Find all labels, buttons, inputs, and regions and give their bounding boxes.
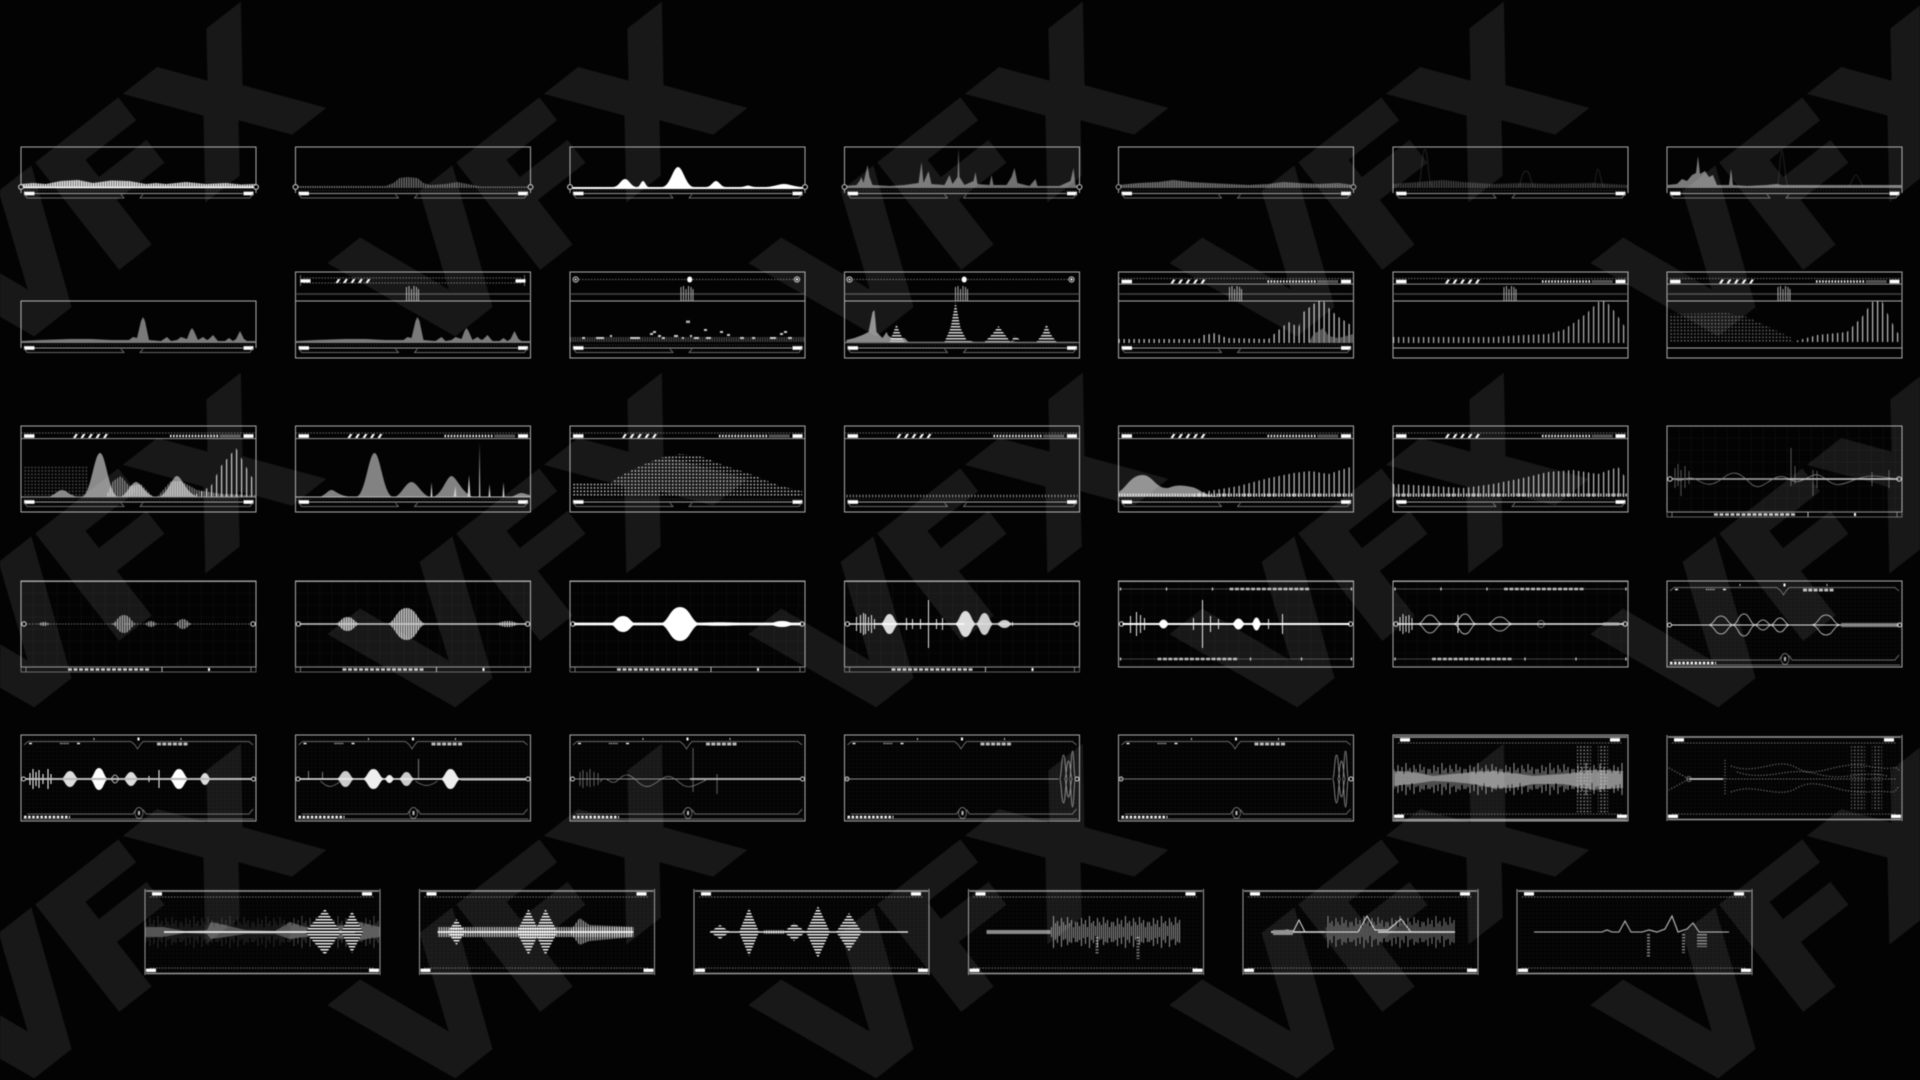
panel: row 1 column 2 waveform — [293, 147, 533, 198]
frame — [1517, 889, 1752, 975]
bottom bracket — [1396, 499, 1626, 506]
bottom bar — [1667, 512, 1902, 517]
frame — [570, 735, 805, 821]
panel: row 4 column 6 waveform — [1393, 581, 1628, 667]
panel: row 1 column 5 waveform — [1116, 147, 1356, 198]
panel: row 6 column 3 waveform — [694, 889, 929, 975]
frame — [1393, 581, 1628, 667]
top status strip — [570, 433, 805, 439]
waveform — [1118, 751, 1348, 807]
waveform — [1122, 600, 1350, 648]
panel: row 4 column 5 waveform — [1118, 581, 1354, 667]
frame — [21, 581, 256, 667]
panel: row 3 column 5 waveform — [1118, 426, 1354, 512]
top status strip — [1118, 278, 1354, 301]
waveform — [1393, 301, 1628, 343]
end markers and bottom bracket — [293, 185, 533, 198]
frame — [1667, 581, 1902, 667]
frame — [1118, 426, 1354, 512]
waveform — [1118, 180, 1354, 188]
frame — [145, 889, 380, 975]
panel: row 2 column 5 waveform — [1118, 272, 1354, 358]
waveform — [300, 759, 526, 789]
frame — [1118, 272, 1354, 358]
scatter waveform — [1669, 745, 1899, 811]
bottom bracket — [24, 499, 254, 506]
frame — [1667, 147, 1902, 193]
frame — [1667, 426, 1902, 512]
panel: row 6 column 5 waveform — [1243, 889, 1478, 975]
end markers and bottom bracket — [1116, 185, 1356, 198]
top status strip — [1118, 433, 1354, 439]
bottom bar — [296, 667, 530, 672]
frame — [296, 581, 530, 667]
frame — [296, 272, 530, 358]
waveform — [21, 180, 256, 188]
bottom bar — [21, 667, 256, 672]
waveform — [574, 607, 801, 641]
panel: row 1 column 3 waveform — [568, 147, 807, 198]
frame — [21, 301, 256, 348]
bottom bracket — [573, 345, 802, 352]
waveform — [848, 600, 1076, 648]
waveform — [21, 317, 256, 343]
frame — [694, 889, 929, 975]
panel: row 2 column 7 waveform — [1667, 272, 1902, 358]
panel: row 5 column 4 HUD waveform — [844, 735, 1080, 821]
waveform — [570, 167, 805, 189]
frame — [844, 426, 1080, 512]
panel: row 2 column 3 waveform — [570, 272, 805, 358]
dotted waveform — [573, 454, 802, 496]
panel: row 5 column 7 scatter waveform — [1667, 735, 1902, 821]
waveform — [1397, 614, 1624, 634]
frame — [844, 581, 1080, 667]
frame — [570, 426, 805, 512]
top status strip — [296, 433, 530, 439]
waveform — [25, 768, 252, 790]
panel: row 6 column 2 waveform — [420, 889, 654, 975]
top status strip — [1393, 278, 1628, 301]
waveform — [1393, 149, 1628, 188]
panel: row 3 column 3 waveform — [570, 426, 805, 512]
top status strip — [21, 433, 256, 439]
top status strip — [844, 433, 1080, 439]
panel: row 3 column 1 waveform — [21, 426, 256, 512]
end markers and bottom bracket — [568, 185, 807, 198]
waveform — [1118, 301, 1354, 343]
bottom bracket — [1122, 499, 1351, 506]
top status strip — [296, 275, 530, 301]
bottom bracket — [298, 345, 528, 352]
frame — [570, 147, 805, 193]
frame — [1393, 272, 1628, 358]
frame — [570, 272, 805, 358]
bottom bracket — [848, 499, 1077, 506]
panel: row 3 column 6 waveform — [1393, 426, 1628, 512]
inner marker bars — [1395, 588, 1626, 660]
frame — [844, 147, 1080, 193]
panel: row 5 column 3 HUD waveform — [570, 735, 805, 821]
bottom bracket — [298, 499, 528, 506]
frame — [1393, 426, 1628, 512]
waveform — [1271, 915, 1455, 949]
bottom bracket — [1396, 190, 1626, 198]
panel: row 6 column 6 waveform — [1517, 889, 1752, 975]
waveform — [844, 148, 1080, 188]
bottom bracket — [573, 499, 802, 506]
panel: row 3 column 7 waveform — [1667, 426, 1902, 517]
waveform — [296, 442, 530, 497]
bottom bracket — [1670, 190, 1900, 198]
bottom bar — [844, 667, 1080, 672]
inner marker bars — [1120, 588, 1352, 660]
watermark: VFX repeated: VFX — [307, 344, 774, 774]
frame — [296, 147, 530, 193]
waveform — [296, 317, 530, 343]
top marker strip — [571, 276, 804, 301]
waveform — [1118, 467, 1354, 497]
panel: row 5 column 6 noise waveform — [1393, 735, 1628, 821]
waveform — [296, 177, 530, 188]
bottom bar — [570, 667, 805, 672]
panel: row 2 column 1 waveform — [21, 301, 256, 352]
waveform — [986, 915, 1180, 959]
panel: row 6 column 4 waveform — [968, 889, 1204, 975]
end markers and bottom bracket — [19, 185, 258, 198]
end markers and bottom bracket — [842, 185, 1082, 198]
panel: row 3 column 2 waveform — [296, 426, 530, 512]
frame — [570, 581, 805, 667]
waveform — [844, 751, 1076, 807]
waveform blocks — [570, 320, 805, 342]
waveform — [1393, 467, 1628, 497]
panel: row 4 column 2 waveform — [296, 581, 530, 672]
flat baseline — [846, 495, 1078, 497]
waveform — [574, 748, 801, 794]
frame — [420, 889, 654, 975]
panel: row 4 column 3 waveform — [570, 581, 805, 672]
panel: row 2 column 2 waveform — [296, 272, 530, 358]
panel: row 5 column 5 HUD waveform — [1118, 735, 1354, 821]
frame — [1667, 272, 1902, 358]
frame — [1118, 581, 1354, 667]
frame — [21, 426, 256, 512]
panel: row 4 column 7 HUD waveform — [1667, 581, 1902, 667]
waveform — [710, 906, 908, 958]
watermark: VFX repeated: VFX — [1149, 344, 1616, 774]
panel: row 6 column 1 waveform — [145, 889, 380, 975]
panel: row 1 column 7 waveform — [1667, 147, 1902, 198]
frame — [1393, 147, 1628, 193]
waveform — [1534, 916, 1729, 957]
waveform — [300, 608, 526, 640]
top status strip — [1667, 278, 1902, 301]
waveform — [1667, 151, 1902, 188]
frame — [968, 889, 1204, 975]
frame — [844, 272, 1080, 358]
waveform — [1671, 614, 1899, 636]
waveform — [1669, 301, 1902, 342]
panel: row 1 column 1 waveform — [19, 147, 258, 198]
frame — [844, 735, 1080, 821]
panel: row 5 column 1 HUD waveform — [21, 735, 256, 821]
waveform — [145, 903, 380, 961]
frame — [296, 426, 530, 512]
frame — [1243, 889, 1478, 975]
panel: row 1 column 4 waveform — [842, 147, 1082, 198]
waveform — [844, 302, 1080, 343]
frame — [21, 735, 256, 821]
top status strip — [1393, 433, 1628, 439]
bottom bracket — [848, 345, 1077, 352]
frame — [21, 147, 256, 193]
waveform — [21, 448, 256, 497]
panel: row 2 column 6 waveform — [1393, 272, 1628, 358]
watermark: VFX repeated: VFX — [728, 344, 1195, 774]
waveform — [1672, 448, 1899, 496]
waveform — [438, 909, 634, 955]
panel: row 2 column 4 waveform — [844, 272, 1080, 358]
frame — [1393, 735, 1628, 821]
top marker strip — [846, 276, 1078, 301]
panel: row 3 column 4 waveform — [844, 426, 1080, 512]
panel: row 5 column 2 HUD waveform — [296, 735, 530, 821]
frame — [1118, 735, 1354, 821]
noise waveform — [1394, 745, 1623, 814]
waveform — [26, 615, 251, 633]
bottom bracket — [1122, 345, 1351, 352]
bottom bracket — [24, 345, 254, 352]
frame — [1118, 147, 1354, 193]
frame — [1667, 735, 1902, 821]
frame — [296, 735, 530, 821]
panel: row 4 column 1 waveform — [21, 581, 256, 672]
panel: row 4 column 4 waveform — [844, 581, 1080, 672]
panel: row 1 column 6 waveform — [1393, 147, 1628, 198]
